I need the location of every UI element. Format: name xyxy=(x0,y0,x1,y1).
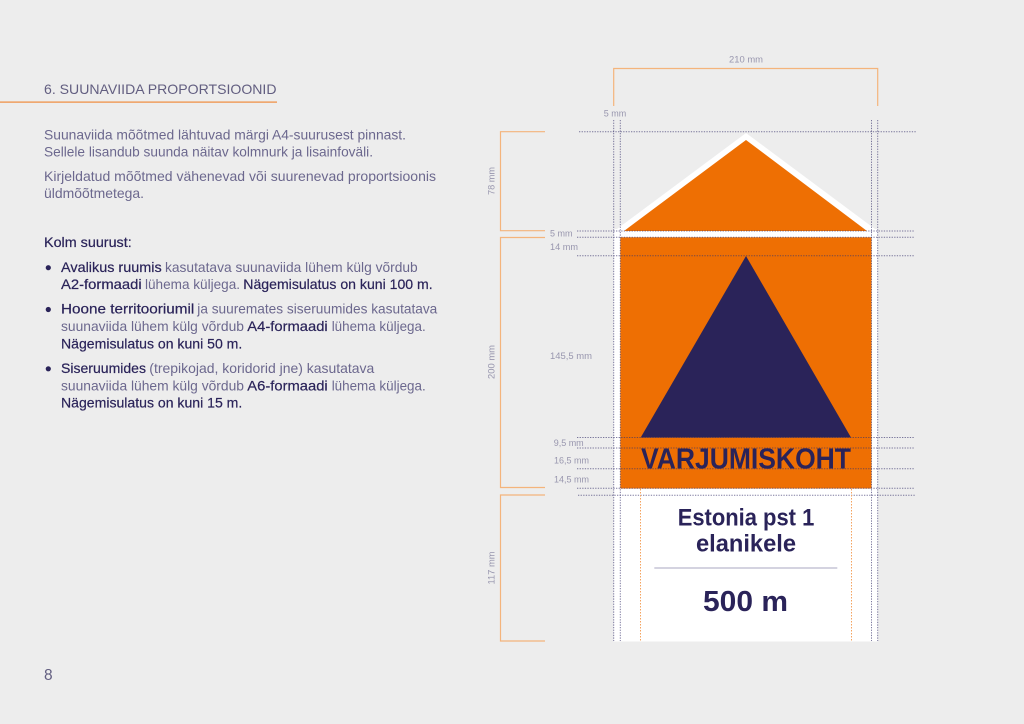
list item: building territory: Nägemisulatus on kuni 50 m. xyxy=(61,335,242,351)
dimension labels: 14 mm xyxy=(550,242,578,253)
sign: distance: 500 m xyxy=(703,586,788,618)
dimension bracket: 210 mm width: 210 mm xyxy=(729,55,763,66)
list item: building territory: lühema küljega. xyxy=(332,318,426,334)
dimension bracket: 200 mm xyxy=(486,238,545,488)
dimension bracket: 200 mm: 200 mm xyxy=(486,345,498,379)
sign: info field address: elanikele xyxy=(696,530,796,557)
text block: introduction xyxy=(44,126,436,201)
dimension bracket: 78 mm: 78 mm xyxy=(486,167,498,195)
sign: orange main panel xyxy=(620,237,872,488)
subheading: three sizes: Kolm suurust: xyxy=(44,234,132,250)
list item: public space: lühema küljega. xyxy=(145,276,240,292)
list item: building territory xyxy=(46,301,437,351)
list item: building territory: Hoone territooriumil xyxy=(61,301,194,317)
list item: indoors: Siseruumides xyxy=(61,360,146,376)
dimension labels: 5 mm xyxy=(604,109,626,120)
sign: shelter label: VARJUMISKOHT xyxy=(641,444,852,476)
dimension labels: 145,5 mm xyxy=(550,351,592,362)
list item: indoors: A6-formaadi xyxy=(247,377,328,393)
text block: introduction: Sellele lisandub suunda näitav kolmnurk ja lisainfoväli. xyxy=(44,144,373,160)
list item: public space: A2-formaadi xyxy=(61,276,142,292)
dimension bracket: 117 mm: 117 mm xyxy=(486,551,498,584)
dimension labels: 5 mm xyxy=(550,229,573,240)
list item: building territory: suunaviida lühem külg võrdub xyxy=(61,318,244,334)
dimension bracket: 210 mm width xyxy=(614,55,878,106)
dimension labels: 14,5 mm xyxy=(554,474,589,485)
list item: indoors: lühema küljega. xyxy=(332,377,426,393)
list item: building territory: A4-formaadi xyxy=(247,318,328,334)
dimension bracket: 78 mm xyxy=(486,132,545,231)
list item: public space: kasutatava suunaviida lühem külg võrdub xyxy=(165,259,418,275)
list item: indoors xyxy=(46,360,426,411)
list item: indoors: (trepikojad, koridorid jne) kasutatava xyxy=(149,360,375,376)
sign: info field address xyxy=(678,504,814,557)
list item: building territory: ja suuremates siseruumides kasutatava xyxy=(196,301,437,317)
heading: 6. SUUNAVIIDA PROPORTSIOONID xyxy=(44,81,276,97)
sign: orange direction triangle xyxy=(624,140,867,231)
list item: public space xyxy=(46,259,433,292)
sign: info field address: Estonia pst 1 xyxy=(678,504,814,531)
list item: public space: Avalikus ruumis xyxy=(61,259,162,275)
list item: indoors: Nägemisulatus on kuni 15 m. xyxy=(61,395,242,411)
sign: white base shape xyxy=(614,133,878,642)
text block: introduction: Suunaviida mõõtmed lähtuvad märgi A4-suurusest pinnast. xyxy=(44,126,406,142)
text block: introduction: üldmõõtmetega. xyxy=(44,185,144,201)
text block: introduction: Kirjeldatud mõõtmed vähenevad või suurenevad proportsioonis xyxy=(44,168,436,184)
page number: 8 xyxy=(44,667,53,684)
dimension bracket: 117 mm xyxy=(486,495,545,641)
dimension labels: 16,5 mm xyxy=(554,455,589,466)
list item: public space: Nägemisulatus on kuni 100 m. xyxy=(243,276,433,292)
sign: info field divider xyxy=(654,567,837,569)
list item: indoors: suunaviida lühem külg võrdub xyxy=(61,377,244,393)
sign: navy civil defence triangle xyxy=(641,256,851,438)
guide lines xyxy=(577,120,917,641)
dimension labels xyxy=(550,109,626,485)
dimension labels: 9,5 mm xyxy=(554,438,584,449)
